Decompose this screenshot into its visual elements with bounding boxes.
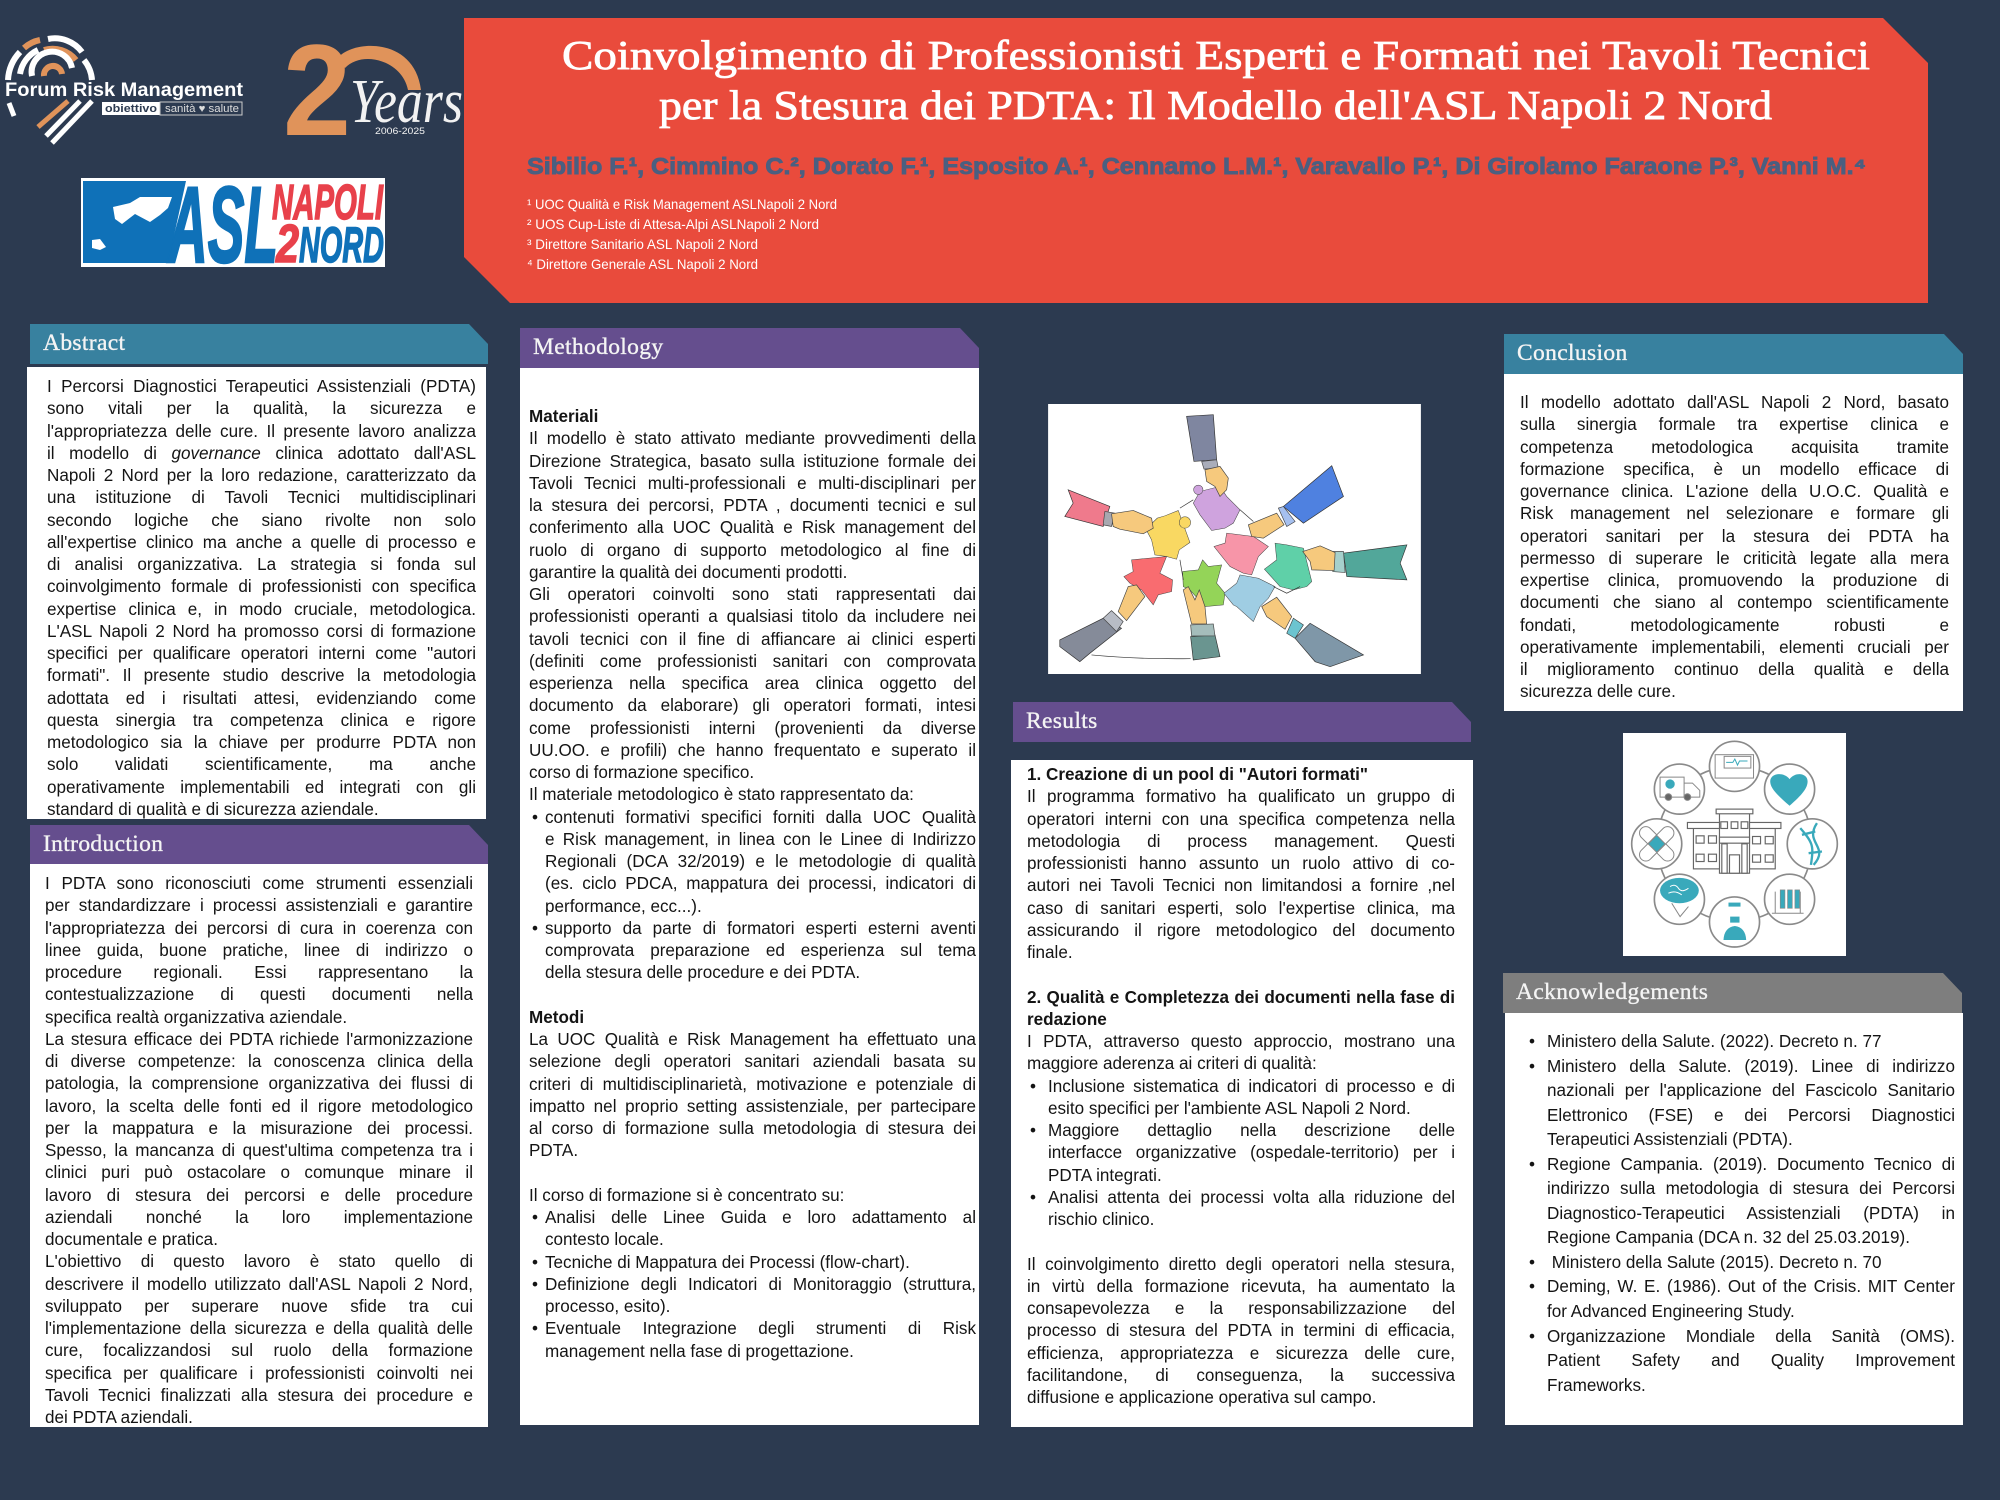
text: abstract [47,377,476,819]
text: results: efficienza, appropriatezza e sicurezza delle cure, [1027,1344,1455,1362]
text: methodology: corso di formazione specifico. [529,763,754,782]
title [562,32,1870,128]
text: references: Deming, W. E. (1986). Out of the Crisis. MIT Center [1547,1277,1955,1296]
text: abstract: il modello di governance clinica adottato dall'ASL [47,444,476,463]
text: results: Inclusione sistematica di indicatori di processo e di [1048,1076,1455,1096]
logo: ASL Napoli 2 Nord: NAPOLI [272,176,384,230]
title banner [464,18,1928,303]
text: methodology: Il materiale metodologico è stato rappresentato da: [529,785,914,804]
text: results: I PDTA, attraverso questo approccio, mostrano una [1027,1032,1455,1051]
text: introduction: descrivere il modello utilizzato dall'ASL Napoli 2 Nord, [45,1274,473,1294]
heading: Introduction [30,825,488,865]
text: methodology: management nella fase di progettazione. [545,1342,854,1360]
text: results: Il programma formativo ha qualificato un gruppo di [1027,787,1455,806]
icon: hospital building [1687,809,1781,873]
text: methodology: Metodi [529,1008,584,1027]
text: methodology [529,407,976,1360]
heading: Abstract [30,324,488,364]
text: methodology: Analisi delle Linee Guida e loro adattamento al [545,1208,976,1227]
text: abstract: di analisi organizzativa. La strategia si fonda sul [47,555,476,574]
text: references: nazionali per l'applicazione del Fascicolo Sanitario [1547,1081,1955,1100]
text: results: redazione [1027,1010,1107,1029]
image: hospital icons ring [1623,733,1846,956]
text: methodology: processo, esito). [545,1297,670,1316]
icon: monitor [1715,755,1754,778]
text: references [1530,1032,1955,1395]
heading: Methodology [520,328,979,368]
text: abstract: metodologico sia la chiave per produrre PDTA non [47,733,476,752]
text: methodology: Direzione Strategica, basato sulla istituzione formale dei [529,452,976,470]
text: methodology: ruolo di organo di supporto metodologico al fine di [529,540,976,560]
icon: doctor [1723,903,1746,940]
text: introduction: linee guida, buone pratiche, linee di indirizzo o [45,941,473,960]
panel: results body [1011,760,1473,1427]
text: conclusion: sicurezza delle cure. [1520,682,1676,701]
icon circles [1632,741,1837,947]
logo: Forum Risk Management [5,38,244,143]
text: methodology: professionisti operanti a qualsiasi titolo da includere nei [529,607,976,626]
authors: Sibilio F.¹, Cimmino C.², Dorato F.¹, Esposito A.¹, Cennamo L.M.¹, Varavallo P.¹, Di Girolamo Faraone P.³, Vanni M.⁴ [527,153,1866,179]
text: methodology: e Risk management, in linea con le Linee di Indirizzo [545,830,976,849]
text: conclusion: Il modello adottato dall'ASL Napoli 2 Nord, basato [1520,393,1949,412]
text: conclusion: fondati, metodologicamente robusti e [1520,616,1949,634]
text: references: Frameworks. [1547,1376,1646,1395]
text: abstract: coinvolgimento formale di professionisti con specifica [47,577,476,596]
text: introduction: lavoro, la scelta delle fonti ed il rigore metodologico [45,1096,473,1116]
text: conclusion: Risk management nel selezionare e formare gli [1520,504,1949,523]
icon: heart [1770,774,1808,806]
logo: Forum Risk Management: Forum Risk Management [5,80,244,101]
text: abstract: Napoli 2 Nord per la loro redazione, caratterizzato da [47,466,476,485]
heading: Methodology: Methodology [533,334,663,360]
text: abstract: formati". Il presente studio descrive la metodologia [47,666,476,685]
text: methodology: Regionali (DCA 32/2019) e le metodologie di qualità [545,852,976,871]
text: results: in virtù della formazione ricevuta, ha aumentato la [1027,1277,1455,1296]
text: introduction: Tavoli Tecnici finalizzati alla stesura dei procedure e [45,1386,473,1405]
text: references: Elettronico (FSE) e dei Percorsi Diagnostici [1547,1106,1955,1125]
logos group [5,17,463,285]
logo: ASL Napoli 2 Nord: ASL [166,164,278,285]
affiliations: ¹ UOC Qualità e Risk Management ASLNapoli 2 Nord [527,196,837,212]
text: results: Analisi attenta dei processi volta alla riduzione del [1048,1188,1455,1207]
affiliations [527,196,837,272]
panel: abstract body [27,367,486,819]
text: methodology: Tavoli Tecnici multi-professionali e multi-disciplinari per [529,474,976,493]
text: methodology: La UOC Qualità e Risk Management ha effettuato una [529,1030,976,1049]
text: references: Organizzazione Mondiale della Sanità (OMS). [1547,1327,1955,1346]
text: conclusion: sulla sinergia formale tra expertise clinica e [1520,415,1949,434]
text: results: metodologia di process management. Questi [1027,832,1455,851]
text: introduction: documentale e pratica. [45,1230,218,1249]
text: methodology: esperienza nella specifica area clinica oggetto del [529,674,976,693]
text: introduction: I PDTA sono riconosciuti come strumenti essenziali [45,874,473,893]
text: references: Regione Campania. (2019). Documento Tecnico di [1547,1155,1955,1174]
logo: 20 years: 2 [283,17,351,163]
text: methodology: comprovata preparazione ed esperienza sul tema [545,941,976,960]
text: methodology: (es. ciclo PDCA, mappatura dei processi, indicatori di [545,874,976,893]
text: introduction: lavoro di stesura dei percorsi e delle procedure [45,1186,473,1204]
text: results: operatori interni con una specifica competenza nella [1027,810,1455,828]
text: methodology: UU.OO. e profili) che hanno frequentato e superato il [529,741,976,760]
text: results: diffusione e applicazione operativa sul campo. [1027,1388,1376,1407]
text: introduction: L'obiettivo di questo lavoro è stato quello di [45,1252,473,1271]
text: abstract: sono vitali per la qualità, la sicurezza e [47,399,476,418]
text: methodology: della stesura delle procedure e dei PDTA. [545,963,860,982]
affiliations: ³ Direttore Sanitario ASL Napoli 2 Nord [527,236,758,252]
text: results: interfacce organizzative (ospedale-territorio) per i [1048,1143,1455,1162]
text: introduction: specifica per qualificare i professionisti coinvolti nei [45,1364,473,1382]
heading: Introduction: Introduction [43,831,163,857]
text: methodology: supporto da parte di formatori esperti esterni aventi [545,919,976,938]
logo: ASL Napoli 2 Nord: NORD [299,217,384,273]
heading: Results [1013,702,1471,742]
panel: methodology body [520,368,979,1425]
text: introduction: dei PDTA aziendali. [45,1408,193,1427]
text: abstract: l'appropriatezza delle cure. Il presente lavoro analizza [47,422,476,440]
text: introduction: per la mappatura e la misurazione dei processi. [45,1119,473,1138]
text: conclusion: permesso di superare le criticità legate alla mera [1520,549,1949,568]
text: results: professionisti hanno assunto un ruolo attivo di co- [1027,854,1455,873]
icon: ambulance [1660,777,1700,800]
heading: Acknowledgements [1503,973,1962,1013]
text: methodology: PDTA. [529,1141,578,1160]
text: abstract: all'expertise clinico ma anche a quelle di processo e [47,533,476,552]
text: results: 1. Creazione di un pool di "Autori formati" [1027,765,1368,784]
text: methodology: criteri di multidisciplinarietà, motivazione e potenziale di [529,1074,976,1094]
image: puzzle hands [1048,404,1421,674]
text: abstract: solo validati scientificamente, ma anche [47,755,476,774]
title: per la Stesura dei PDTA: Il Modello dell'ASL Napoli 2 Nord [659,82,1772,128]
text: methodology: Materiali [529,407,598,426]
puzzle pieces [1124,485,1312,622]
text: conclusion [1520,393,1949,701]
text: results: esito specifici per l'ambiente ASL Napoli 2 Nord. [1048,1099,1411,1118]
text: methodology: la stesura dei percorsi, PDTA , documenti tecnici e sul [529,496,976,515]
text: references: indirizzo sulla metodologia di stesura dei Percorsi [1547,1179,1955,1198]
text: abstract: L'ASL Napoli 2 Nord ha promosso corsi di formazione [47,622,476,641]
text: abstract: standard di qualità e di sicurezza aziendale. [47,800,379,819]
text: introduction: sviluppato per superare nuove sfide tra cui [45,1297,473,1316]
text: conclusion: competenza metodologica acquisita tramite [1520,438,1949,456]
text: results: consapevolezza e la responsabilizzazione del [1027,1299,1455,1318]
text: introduction [45,874,473,1427]
text: conclusion: formazione specifica, è un modello efficace di [1520,460,1949,479]
text: abstract: questa sinergia tra competenza clinica e rigore [47,711,476,730]
heading: Conclusion: Conclusion [1517,340,1628,366]
text: references: Diagnostico-Terapeutici Assistenziali (PDTA) in [1547,1204,1955,1223]
icon: test tubes [1772,890,1804,913]
text: references: Ministero della Salute. (2022). Decreto n. 77 [1547,1032,1881,1051]
text: methodology: Definizione degli Indicatori di Monitoraggio (struttura, [545,1275,976,1294]
text: methodology: documento da elaborare) gli operatori formati, intesi [529,696,976,715]
text: references: Ministero della Salute (2015). Decreto n. 70 [1552,1253,1881,1272]
text: conclusion: expertise clinica, promuovendo la produzione di [1520,571,1949,590]
text: references: for Advanced Engineering Study. [1547,1302,1795,1321]
text: methodology: come professionisti interni (provenienti da diverse [529,718,976,738]
text: methodology: Il corso di formazione si è concentrato su: [529,1186,844,1205]
text: methodology: Tecniche di Mappatura dei Processi (flow-chart). [545,1252,910,1272]
text: conclusion: documenti che siano al contempo scientificamente [1520,593,1949,612]
logo: Forum Risk Management: sanità ♥ salute [165,103,239,115]
text: results: processo di stesura del PDTA in termini di efficacia, [1027,1321,1455,1340]
text: methodology: contenuti formativi specifici forniti dalla UOC Qualità [545,808,976,826]
text: abstract: specifici per qualificare operatori interni come "autori [47,644,476,663]
text: references: Regione Campania (DCA n. 32 del 25.03.2019). [1547,1228,1910,1247]
text: methodology: garantire la qualità dei documenti prodotti. [529,563,847,582]
text: abstract: operativamente implementabili ed integrati con gli [47,778,476,796]
text: methodology: Il modello è stato attivato mediante provvedimenti della [529,429,976,448]
text: introduction: La stesura efficace dei PDTA richiede l'armonizzazione [45,1030,473,1049]
text: methodology: impatto nel proprio setting assistenziale, per partecipare [529,1097,976,1116]
text: abstract: secondo logiche che siano rivolte non solo [47,510,476,530]
text: references: Patient Safety and Quality Improvement [1547,1351,1955,1370]
text: methodology: conferimento alla UOC Qualità e Risk management del [529,518,976,537]
text: introduction: specifica realtà organizzativa aziendale. [45,1008,347,1026]
text: abstract: I Percorsi Diagnostici Terapeutici Assistenziali (PDTA) [47,377,476,396]
text: introduction: per standardizzare i processi assistenziali e garantire [45,896,473,915]
text: results: maggiore aderenza ai criteri di qualità: [1027,1054,1317,1073]
text: conclusion: il miglioramento continuo della qualità e della [1520,660,1949,679]
logo: 20 years [283,17,463,163]
text: references: Ministero della Salute. (2019). Linee di indirizzo [1547,1057,1955,1076]
text: abstract: una istituzione di Tavoli Tecnici multidisciplinari [47,488,476,507]
sleeves [1060,415,1407,667]
text: introduction: patologia, la comprensione organizzativa dei flussi di [45,1074,473,1093]
text: results: finale. [1027,943,1073,962]
text: methodology: tavoli tecnici con il fine di affiancare ai clinici esperti [529,630,976,648]
text: introduction: aziendali nonché la loro implementazione [45,1208,473,1227]
affiliations: ⁴ Direttore Generale ASL Napoli 2 Nord [527,256,758,272]
text: conclusion: operativamente implementabili, elementi cruciali per [1520,638,1949,657]
icon: brain [1660,878,1699,917]
text: introduction: clinici puri può ostacolare o comunque minare il [45,1163,473,1182]
heading: Abstract: Abstract [43,330,125,356]
text: abstract: expertise clinica e, in modo cruciale, metodologica. [47,600,476,618]
icon: bandage [1637,824,1677,864]
text: results: assicurando il rigore metodologico del documento [1027,921,1455,940]
logo: 20 years: 2006-2025 [375,126,425,137]
panel: introduction body [30,864,488,1427]
text: introduction: l'implementazione della sicurezza e della qualità delle [45,1319,473,1338]
text: results: Il coinvolgimento diretto degli operatori nella stesura, [1027,1254,1455,1274]
panel: acknowledgements body [1505,1013,1963,1425]
text: methodology: Eventuale Integrazione degli strumenti di Risk [545,1319,976,1338]
text: introduction: procedure regionali. Essi rappresentano la [45,963,473,982]
text: methodology: contesto locale. [545,1230,664,1249]
heading: Results: Results [1026,708,1098,734]
text: introduction: contestualizzazione di questi documenti nella [45,985,473,1004]
logo: Forum Risk Management: obiettivo [105,103,157,115]
heading: Acknowledgements: Acknowledgements [1516,979,1708,1005]
heading: Conclusion [1504,334,1963,374]
text: conclusion: operatori sanitari per la stesura dei PDTA ha [1520,526,1949,546]
text: results: Maggiore dettaglio nella descrizione delle [1048,1121,1455,1140]
affiliations: ² UOS Cup-Liste di Attesa-Alpi ASLNapoli 2 Nord [527,216,819,232]
text: results: caso di sanitari esperti, solo l'expertise clinica, ma [1027,898,1455,918]
text: introduction: cure, focalizzandosi sul ruolo della formazione [45,1341,473,1360]
text: results: facilitandone, di conseguenza, la successiva [1027,1366,1455,1385]
text: results: 2. Qualità e Completezza dei documenti nella fase di [1027,988,1455,1006]
text: conclusion: governance clinica. L'azione della U.O.C. Qualità e [1520,482,1949,501]
text: methodology: performance, ecc...). [545,896,702,916]
text: abstract: adottata ed i risultati attesi, evidenziando come [47,688,476,708]
text: results: rischio clinico. [1048,1210,1154,1229]
text: references: Terapeutici Assistenziali (PDTA). [1547,1130,1793,1149]
text: introduction: l'appropriatezza dei percorsi di cura in coerenza con [45,918,473,938]
icon: DNA [1800,823,1822,865]
text: introduction: Spesso, la mancanza di quest'ultima competenza tra i [45,1141,473,1160]
text: methodology: selezione degli operatori sanitari aziendali basata su [529,1052,976,1071]
text: results [1027,765,1455,1407]
logo: ASL Napoli 2 Nord: 2 [275,214,299,274]
cuffs [1103,460,1345,638]
text: introduction: di diverse competenze: la conoscenza clinica della [45,1052,473,1071]
hands [1112,466,1335,629]
title: Coinvolgimento di Professionisti Esperti e Formati nei Tavoli Tecnici [562,32,1870,78]
text: results: PDTA integrati. [1048,1166,1162,1184]
text: methodology: Gli operatori coinvolti sono stati rappresentati dai [529,585,976,604]
text: methodology: (definiti come professionisti sanitari con comprovata [529,652,976,671]
text: results: autori nei Tavoli Tecnici non limitandosi a fornire ,nel [1027,876,1455,895]
panel: conclusion body [1504,374,1963,711]
text: methodology: al corso di formazione sulla metodologia di stesura dei [529,1119,976,1138]
